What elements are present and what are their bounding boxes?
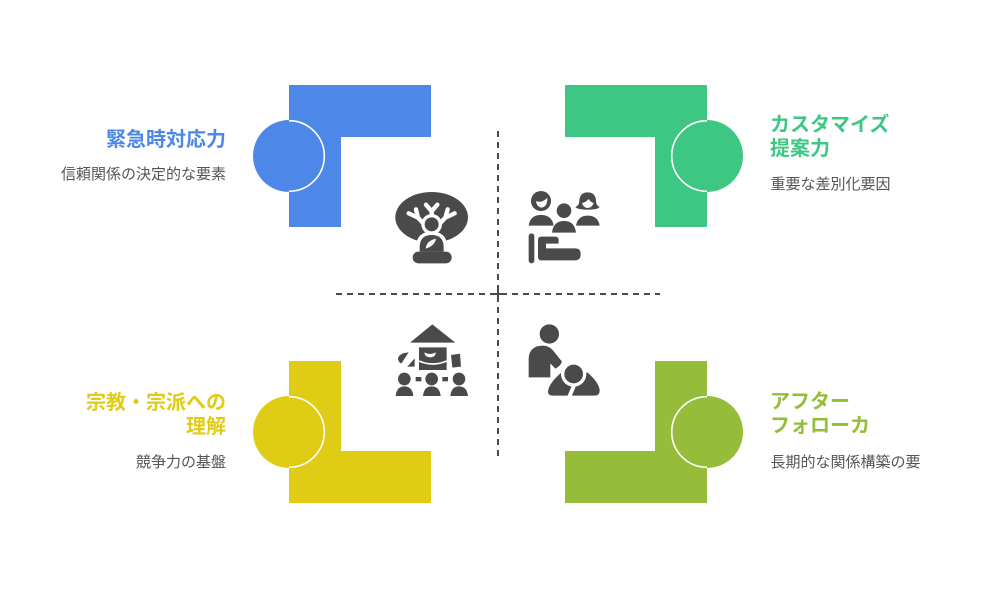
heading: olive: アフター: [770, 391, 850, 413]
heading: blue: 緊急時対応力: [106, 129, 226, 151]
heading: green: [770, 114, 889, 160]
description: blue: 信頼関係の決定的な要素: [61, 166, 226, 183]
icon: caregiver and person: [529, 324, 600, 397]
heading: yellow: [86, 392, 226, 438]
heading: green: 提案力: [770, 138, 830, 160]
description: yellow: 競争力の基盤: [136, 454, 226, 471]
heading: olive: [770, 391, 870, 437]
olive L-shaped panel with circle: [565, 361, 743, 503]
quadrant divider lines: [336, 131, 660, 456]
yellow L-shaped panel with circle: [253, 361, 431, 503]
description: olive: 長期的な関係構築の要: [770, 454, 921, 471]
icon: three people and desk: [529, 191, 600, 263]
heading: yellow: 理解: [186, 416, 226, 438]
icon: tree with meditating figure: [395, 192, 468, 263]
heading: olive: フォローカ: [770, 415, 870, 437]
heading: green: カスタマイズ: [770, 114, 889, 136]
description: green: 重要な差別化要因: [770, 176, 891, 193]
blue L-shaped panel with circle: [253, 85, 431, 227]
green L-shaped panel with circle: [565, 85, 743, 227]
icon: shrine and congregation: [396, 324, 468, 396]
heading: yellow: 宗教・宗派への: [86, 392, 226, 414]
